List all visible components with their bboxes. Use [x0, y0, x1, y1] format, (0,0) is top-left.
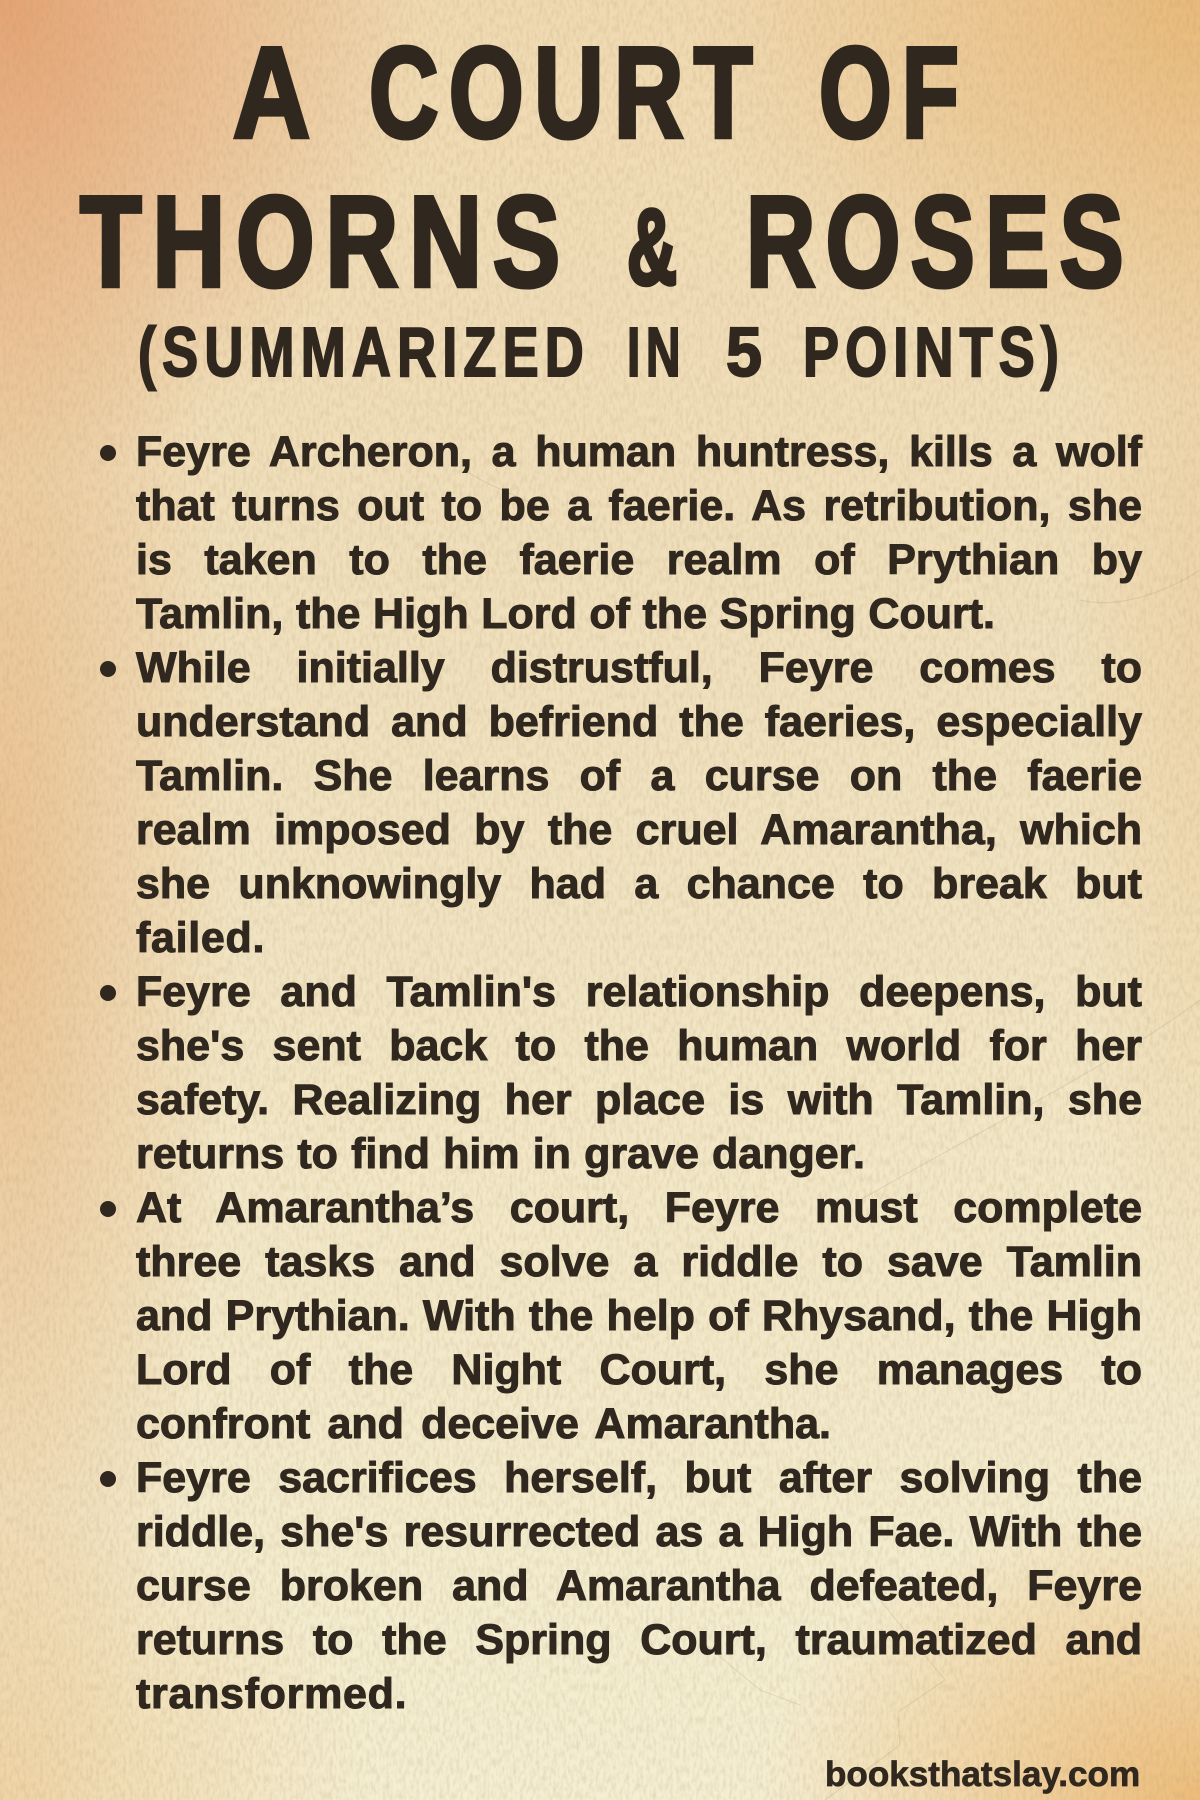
text: riddle, she's resurrected as a High Fae. With the	[136, 1508, 1142, 1556]
text: transformed.	[136, 1670, 407, 1718]
text: confront and deceive Amarantha.	[136, 1400, 831, 1448]
text: is taken to the faerie realm of Prythian by	[136, 536, 1142, 584]
bullet point 2	[100, 644, 1142, 962]
title and subtitle	[79, 21, 1134, 392]
text: and Prythian. With the help of Rhysand, the High	[136, 1292, 1142, 1340]
text: realm imposed by the cruel Amarantha, which	[136, 806, 1142, 854]
bullet point 4	[100, 1184, 1142, 1448]
text: returns to find him in grave danger.	[136, 1130, 865, 1178]
bullet point 3	[100, 968, 1142, 1178]
title line 1: COURT	[369, 21, 763, 165]
title line 2: THORNS	[80, 170, 571, 314]
text: Tamlin. She learns of a curse on the faerie	[136, 752, 1142, 800]
subtitle	[138, 313, 1065, 391]
text: three tasks and solve a riddle to save Tamlin	[136, 1238, 1142, 1286]
bullet point 1	[100, 428, 1143, 638]
text: While initially distrustful, Feyre comes to	[136, 644, 1142, 692]
text: Lord of the Night Court, she manages to	[136, 1346, 1142, 1394]
text: Feyre and Tamlin's relationship deepens, but	[136, 968, 1142, 1016]
text: she unknowingly had a chance to break but	[136, 860, 1142, 908]
title line 2: &	[627, 186, 677, 307]
text: Feyre Archeron, a human huntress, kills a wolf	[136, 428, 1142, 476]
text: Tamlin, the High Lord of the Spring Court.	[136, 590, 995, 638]
text: understand and befriend the faeries, especially	[136, 698, 1142, 746]
text: that turns out to be a faerie. As retribution, she	[136, 482, 1142, 530]
text: returns to the Spring Court, traumatized and	[136, 1616, 1142, 1664]
text: failed.	[136, 914, 265, 962]
text: Feyre sacrifices herself, but after solving the	[136, 1454, 1142, 1502]
subtitle: (SUMMARIZED	[138, 313, 590, 391]
title line 1: A	[233, 21, 310, 165]
website footer: booksthatslay.com	[825, 1755, 1140, 1794]
text: safety. Realizing her place is with Tamlin, she	[136, 1076, 1142, 1124]
text: curse broken and Amarantha defeated, Feyre	[136, 1562, 1142, 1610]
bullet point 5	[100, 1454, 1142, 1718]
text: At Amarantha’s court, Feyre must complete	[136, 1184, 1142, 1232]
text: she's sent back to the human world for her	[136, 1022, 1142, 1070]
subtitle: POINTS)	[803, 313, 1065, 391]
title line 2	[80, 170, 1134, 314]
subtitle: 5	[726, 313, 762, 391]
title line 1: OF	[819, 21, 969, 165]
subtitle: IN	[627, 313, 686, 391]
